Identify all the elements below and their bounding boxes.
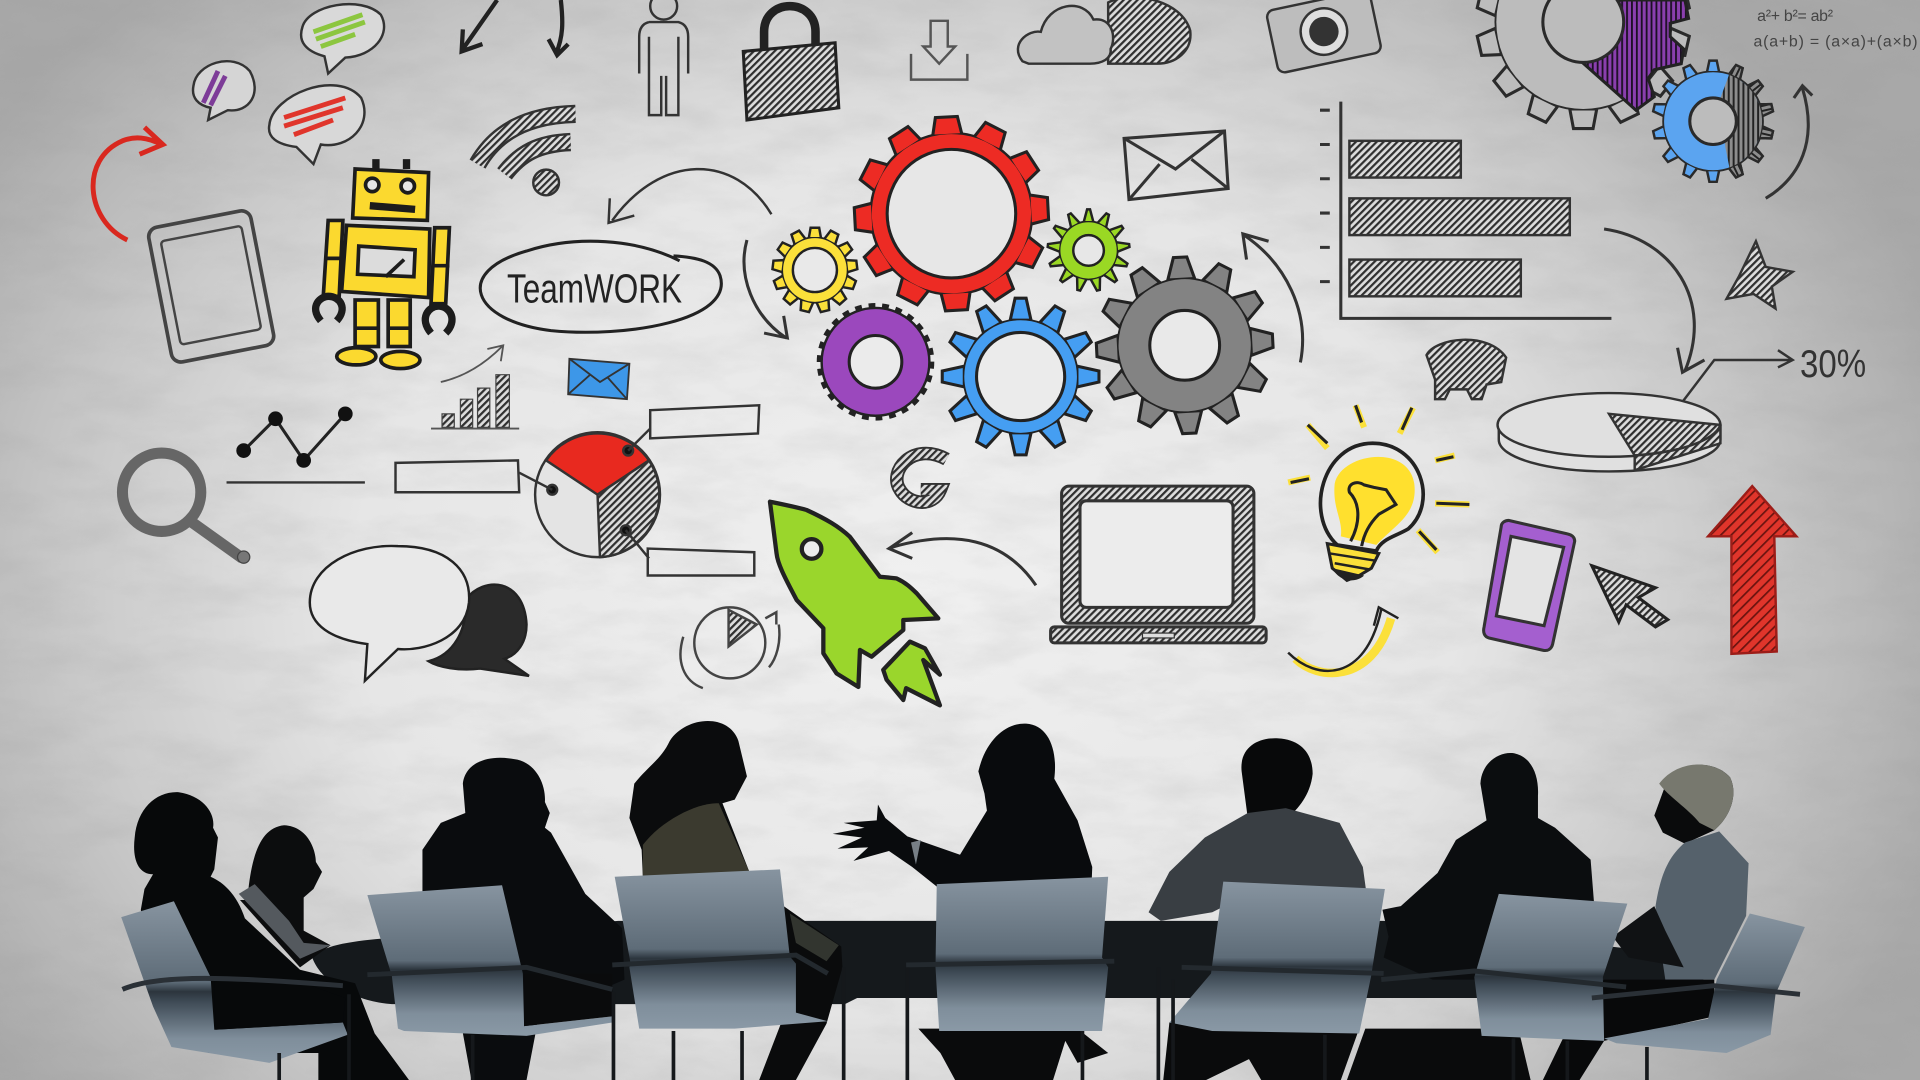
teamwork ellipse label (480, 241, 721, 332)
gear: yellow (772, 228, 858, 312)
chair 5 (1169, 882, 1385, 1080)
person 2: girl with blouse (239, 825, 331, 967)
formula text (1753, 8, 1918, 51)
icon: red up arrow (1708, 486, 1796, 654)
icon: speech bubble green (301, 4, 384, 73)
icon: magnifier (122, 453, 250, 563)
chair 7 (1592, 913, 1805, 1080)
line chart (227, 407, 365, 482)
icon: envelope (1124, 131, 1228, 200)
icon: piggy bank (1427, 340, 1506, 399)
person 6: man in light shirt (1149, 738, 1367, 1080)
arrow: curved top right (1766, 86, 1812, 198)
arrow: gears to teamwork (744, 240, 787, 338)
gear: top right outline with purple part (1476, 0, 1690, 129)
gear: green (1047, 209, 1130, 291)
icon: person outline (639, 0, 688, 115)
office chairs (121, 869, 1805, 1080)
arrow: right of gears (1243, 234, 1303, 362)
formula text: a²+ b²= ab² (1757, 8, 1833, 25)
gear: top right blue (1653, 61, 1774, 182)
icon: clock with cycle arrows (680, 607, 779, 688)
icon: star (1727, 241, 1793, 309)
icon: camera (1266, 0, 1382, 74)
bar chart (1320, 102, 1611, 318)
conference table (312, 921, 1708, 1004)
icon: laptop (1051, 486, 1266, 643)
icon: robot (316, 159, 452, 369)
icon: speech bubble purple (193, 61, 255, 120)
gear: gray (1092, 253, 1277, 438)
gear: blue (942, 298, 1099, 455)
arrow: red curved (93, 127, 163, 240)
formula text: a(a+b) = (a×a)+(a×b) (1753, 34, 1918, 51)
gear: red (850, 112, 1053, 315)
chair 2 (367, 885, 613, 1080)
chair 4 (906, 877, 1158, 1080)
arrow: to teamwork (609, 169, 771, 223)
icon: padlock (743, 6, 839, 120)
teamwork ellipse label: TeamWORK (507, 265, 682, 311)
icon: G arrow (897, 454, 947, 502)
icon: wifi (478, 114, 576, 195)
person 3: man in dark suit (422, 758, 624, 1080)
percent label with arrow (1671, 343, 1866, 416)
gear: purple (820, 307, 931, 417)
icon: clouds (1018, 0, 1190, 64)
icon: rocket (770, 502, 940, 705)
people silhouettes (134, 721, 1749, 1080)
person 7: man in suit (1347, 753, 1594, 1080)
icon: small bar chart with arrow (431, 345, 519, 429)
percent label with arrow: 30% (1800, 343, 1866, 386)
icon: light bulb (1288, 405, 1469, 580)
icon: tablet (147, 209, 275, 364)
arrow: bar chart to pie (1604, 229, 1704, 372)
arrow: laptop to rocket (889, 533, 1036, 585)
person 8: blonde woman (1543, 764, 1749, 1080)
person 4: woman with ponytail (629, 721, 842, 1080)
person 5: man gesturing (833, 724, 1108, 1080)
icon: large speech bubbles (310, 546, 529, 681)
person 1: woman in profile (134, 792, 409, 1080)
3D pie chart (1498, 393, 1720, 471)
arrow: yellow curved (1288, 607, 1398, 673)
icon: speech bubble red (269, 85, 364, 164)
icon: top arrows (462, 0, 568, 55)
chair 6 (1381, 894, 1627, 1080)
icon: cursor (1592, 566, 1668, 627)
chair 3 (612, 869, 844, 1080)
chair 1 (121, 901, 349, 1080)
icon: download (911, 21, 967, 80)
pie diagram with labels (396, 405, 759, 576)
icon: phone (1484, 520, 1575, 651)
icon: blue mail (568, 359, 629, 399)
